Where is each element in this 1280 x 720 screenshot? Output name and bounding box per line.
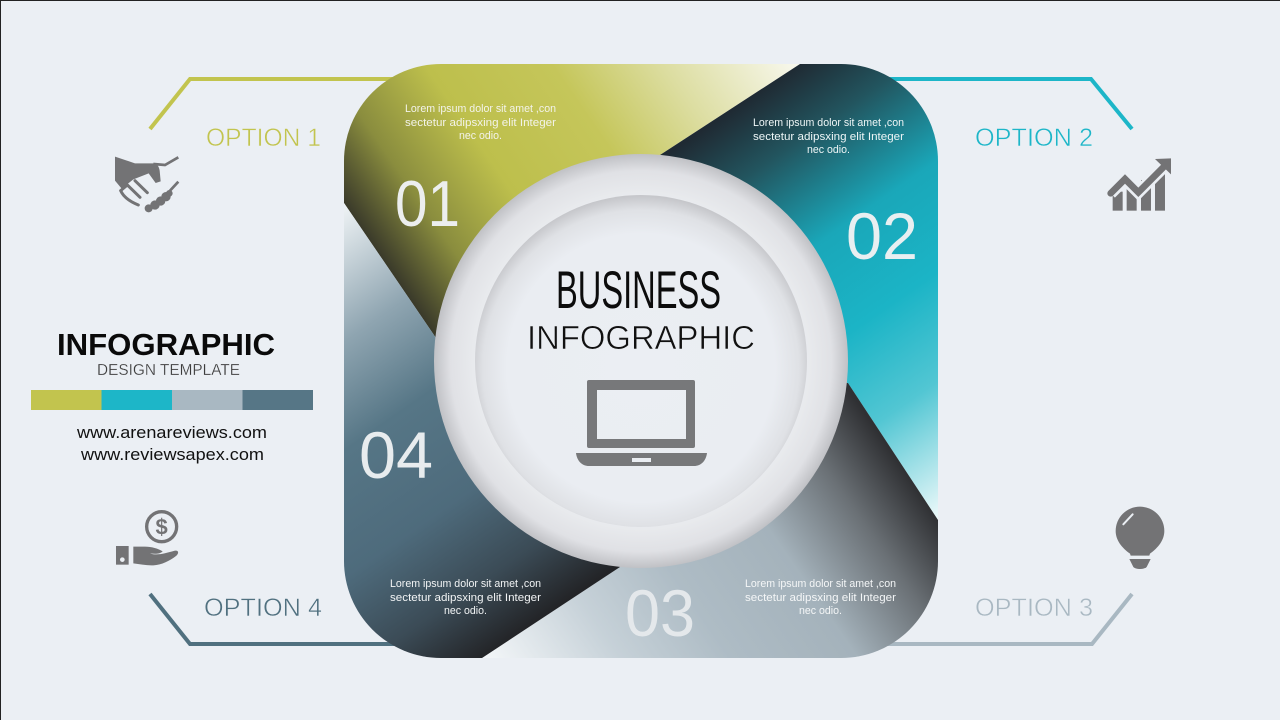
icon: light bulb [1116,507,1164,569]
text block 01: Lorem ipsum dolor sit amet ,con [405,103,556,115]
connector line: option 4 [150,594,410,644]
text block 04: Lorem ipsum dolor sit amet ,con [390,578,541,590]
text block 02 [753,117,904,156]
website 2: www.reviewsapex.com [80,445,264,464]
color legend bar [31,390,313,410]
text block 02: Lorem ipsum dolor sit amet ,con [753,117,904,129]
number 03: 03 [625,576,695,650]
connector line: option 1 [150,79,410,129]
subtitle: design template: DESIGN TEMPLATE [97,362,240,379]
option 3 label: OPTION 3 [975,594,1093,622]
text block 02: sectetur adipsxing elit Integer [753,131,904,143]
outer circle ring [434,154,848,568]
text block 04: sectetur adipsxing elit Integer [390,592,541,604]
segment 03 [482,361,938,658]
option 4 label: OPTION 4 [204,594,322,622]
icon: laptop [576,380,707,466]
website 1: www.arenareviews.com [76,423,267,442]
number 02: 02 [846,199,918,273]
icon: rising bar chart with arrow [1111,158,1171,211]
text block 03: nec odio. [799,605,842,617]
text block 03 [745,578,896,617]
segment 04 [344,203,641,658]
connector line: option 2 [875,79,1132,129]
segment 02 [641,64,938,520]
text block 02: nec odio. [807,144,850,156]
text block 01: nec odio. [459,130,502,142]
inner circle disc [475,195,807,527]
center heading: business: BUSINESS [556,261,721,320]
option 2 label: OPTION 2 [975,124,1093,152]
option 1 label: OPTION 1 [206,124,321,152]
connector line: option 3 [875,594,1132,644]
title: infographic: INFOGRAPHIC [57,327,275,362]
text block 01: sectetur adipsxing elit Integer [405,117,556,129]
number 04: 04 [359,418,433,492]
icon: hand with dollar coin [116,512,178,565]
rounded square with four segments [344,64,938,658]
text block 04: nec odio. [444,605,487,617]
segment 01 [344,64,800,361]
icon: handshake [115,157,178,212]
text block 01 [405,103,556,142]
text block 03: Lorem ipsum dolor sit amet ,con [745,578,896,590]
center heading: infographic: INFOGRAPHIC [527,320,755,357]
icon: hand with dollar coin: $ [156,515,168,540]
text block 03: sectetur adipsxing elit Integer [745,592,896,604]
left title block [31,327,313,464]
number 01: 01 [395,167,460,240]
text block 04 [390,578,541,617]
